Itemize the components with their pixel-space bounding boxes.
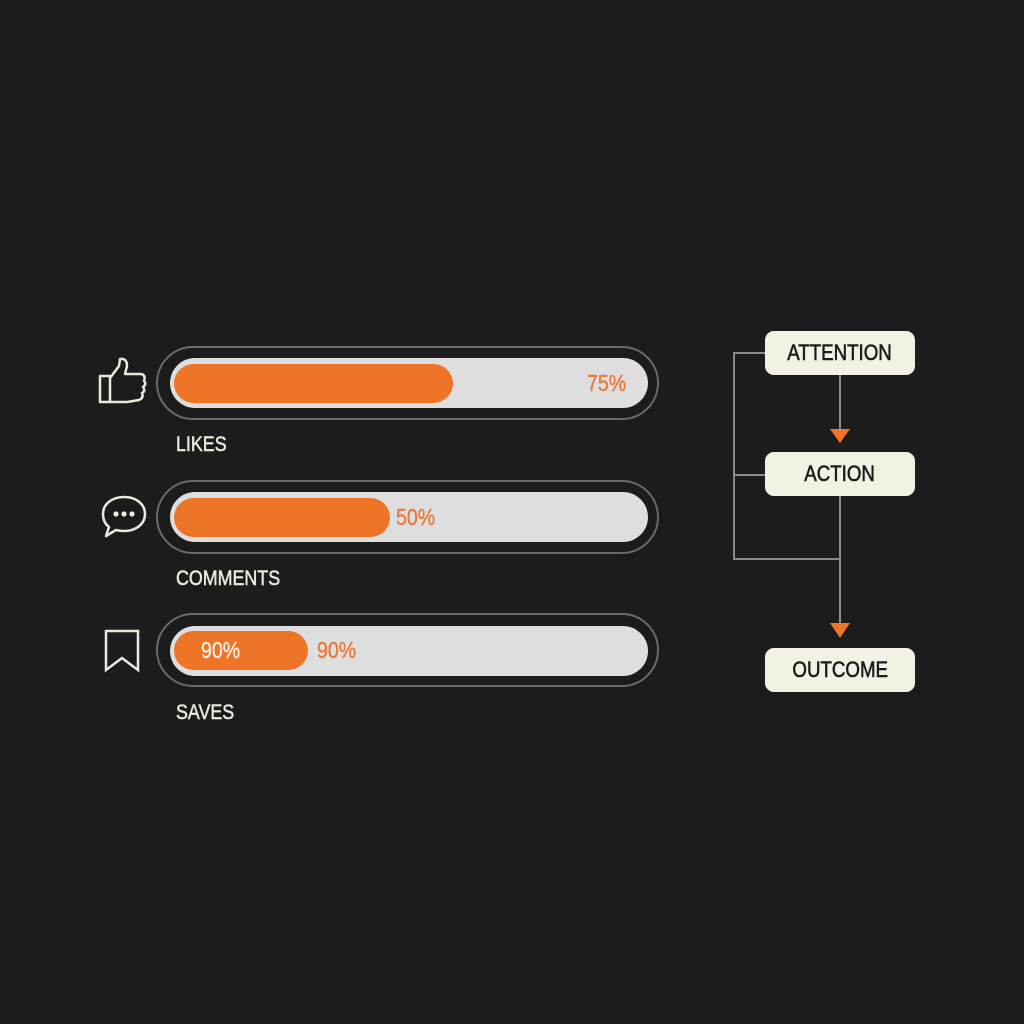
box: outcome bbox=[765, 648, 915, 692]
box: attention: ATTENTION bbox=[788, 340, 892, 365]
bar: likes: 75% bbox=[587, 370, 626, 396]
bar: saves: 90% bbox=[317, 637, 356, 663]
icon: speech bubble bbox=[102, 496, 146, 538]
icon: bookmark bbox=[104, 630, 140, 672]
icon: thumbs up bbox=[98, 358, 147, 404]
bar: comments: 50% bbox=[396, 504, 435, 530]
bar: saves bbox=[156, 613, 659, 687]
box: action: ACTION bbox=[805, 461, 875, 486]
bar: likes bbox=[156, 346, 659, 420]
bar: saves: 90% bbox=[201, 637, 240, 663]
bar: comments bbox=[156, 480, 659, 554]
label: comments: COMMENTS bbox=[176, 567, 280, 590]
box: attention bbox=[765, 331, 915, 375]
box: action bbox=[765, 452, 915, 496]
label: saves: SAVES bbox=[176, 701, 234, 724]
box: outcome: OUTCOME bbox=[792, 657, 888, 682]
label: likes: LIKES bbox=[176, 433, 227, 456]
